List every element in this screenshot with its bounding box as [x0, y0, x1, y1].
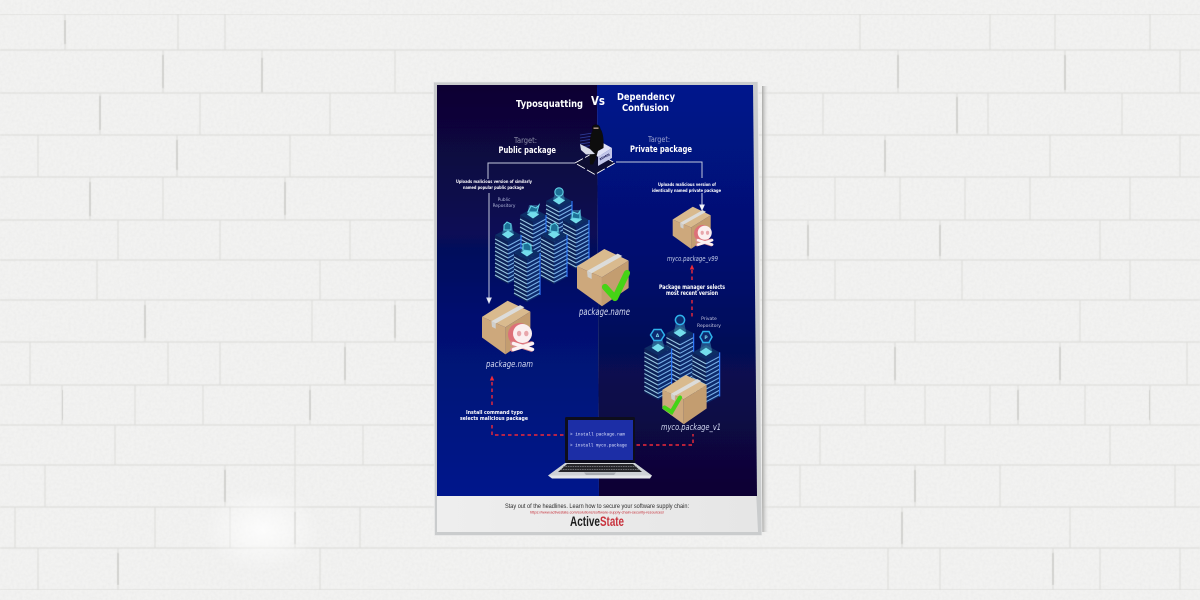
icon: green check	[605, 273, 627, 298]
arrow: upload to private package	[700, 193, 704, 210]
icon: laptop with terminal	[548, 417, 652, 478]
tower icons	[504, 188, 580, 251]
label: public repository	[493, 197, 516, 209]
caption: install typo	[460, 410, 528, 422]
arrowhead: typo path	[490, 376, 494, 380]
connector lines from hacker	[488, 162, 702, 179]
icon: skull small	[694, 225, 712, 245]
caption: package manager: most recent version	[666, 290, 718, 297]
label: public repository: Public	[498, 197, 511, 203]
caption: package manager	[659, 284, 725, 297]
caption: install typo: Install command typo	[466, 410, 523, 416]
title: Typosquatting	[516, 99, 583, 110]
title: Dependency	[617, 92, 675, 103]
package.nam malicious box	[482, 301, 532, 354]
heading: right target: Private package	[630, 145, 692, 155]
left upload caption: Uploads malicious version of similarly	[456, 179, 532, 184]
heading: left target	[498, 136, 556, 156]
left upload caption	[456, 179, 532, 190]
label: package.nam: package.nam	[485, 360, 533, 370]
myco.package_v99 malicious box	[673, 207, 712, 249]
heading: right target: Target:	[647, 135, 670, 144]
poster frame	[434, 82, 762, 536]
footer call to action: Stay out of the headlines. Learn how to secure your software supply chain:	[505, 504, 689, 510]
red dashed path: version selection	[691, 270, 693, 318]
arrow: upload to public package	[487, 193, 491, 303]
tower icon letters: A	[656, 333, 660, 339]
right upload caption: identically named private package	[652, 188, 721, 193]
icon: green check small	[664, 398, 680, 412]
caption: install typo: selects malicious package	[460, 416, 528, 422]
label: myco.package_v1: myco.package_v1	[661, 423, 721, 433]
left panel: typosquatting	[437, 85, 599, 496]
terminal text: > install myco.package	[570, 444, 627, 448]
tower icon letters	[656, 333, 708, 341]
poster paper footer area	[437, 490, 758, 532]
icon: skull	[508, 323, 532, 350]
tower icons	[650, 315, 712, 342]
right panel: dependency confusion	[597, 85, 757, 496]
arrowhead: version selection	[690, 264, 694, 270]
label: package.name: package.name	[578, 307, 630, 318]
label: myco.package_v99: myco.package_v99	[667, 255, 718, 263]
label: private repository	[697, 316, 721, 329]
left upload caption: named popular public package	[463, 185, 524, 190]
heading: right target	[630, 135, 692, 155]
icon: hacker at laptop on platform: ADMIN	[599, 152, 611, 161]
heading: left target: Public package	[498, 146, 556, 156]
tower icon letters: P	[704, 335, 708, 341]
logo: ActiveState: State	[600, 513, 624, 529]
title: Vs	[591, 93, 605, 108]
red dashed path: myco package to v1	[630, 434, 693, 445]
terminal text	[570, 432, 627, 448]
poster	[437, 85, 758, 532]
label: private repository: Private	[701, 316, 717, 322]
logo: ActiveState: Active	[570, 513, 600, 529]
icon: hacker at laptop on platform	[575, 125, 615, 174]
public repository server towers	[495, 188, 589, 302]
heading: left target: Target:	[513, 136, 537, 145]
title	[516, 92, 675, 114]
label: public repository: Repository	[493, 203, 516, 209]
right upload caption: Uploads malicious version of	[658, 182, 716, 187]
red dashed path: typo to malicious package	[492, 382, 570, 435]
footer url: https://www.activestate.com/solutions/software-supply-chain-security-resources/	[530, 510, 664, 514]
right upload caption	[652, 182, 721, 193]
caption: package manager: Package manager selects	[659, 284, 725, 291]
private repository server towers	[644, 315, 720, 404]
title: Confusion	[622, 103, 669, 114]
label: private repository: Repository	[697, 323, 721, 329]
package.name box with check mark	[577, 249, 629, 306]
myco.package_v1 box with check mark	[662, 375, 707, 424]
terminal text: > install package.nam	[570, 432, 625, 438]
